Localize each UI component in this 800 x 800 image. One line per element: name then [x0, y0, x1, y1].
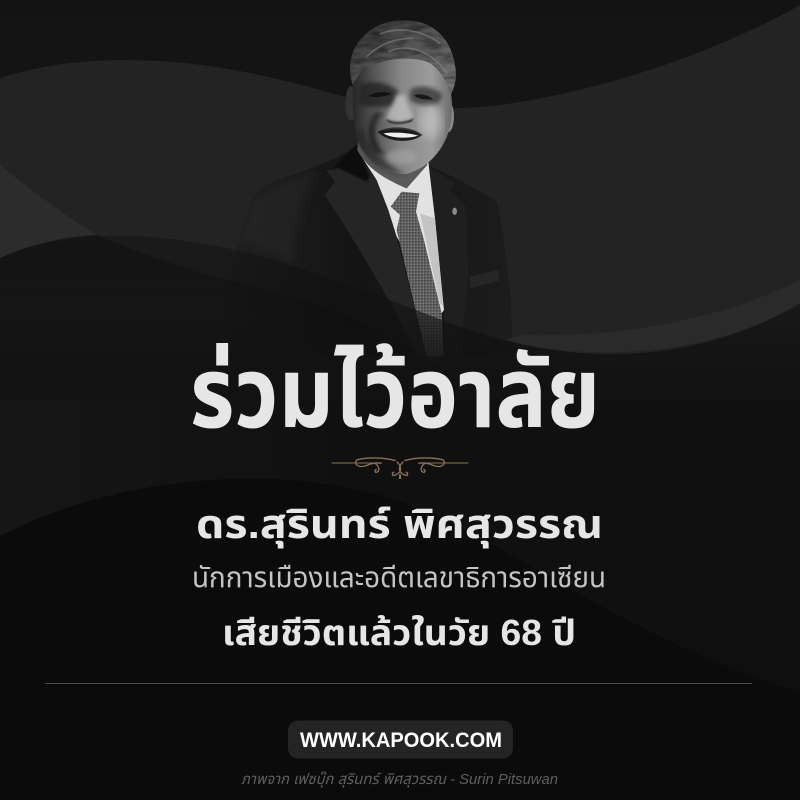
- brow shadow: [358, 82, 398, 107]
- neck: [357, 140, 427, 188]
- right ear: [442, 101, 454, 132]
- lapel pin: [452, 208, 457, 215]
- shirt: [357, 150, 444, 313]
- name heading: ดร.สุรินทร์ พิศสุวรรณ: [196, 503, 603, 548]
- hair: [350, 20, 456, 95]
- ornament divider: [332, 458, 468, 479]
- collar shadow left: [335, 145, 370, 182]
- left ear: [345, 86, 357, 121]
- background: lower section: [0, 400, 800, 800]
- nostril shadow: [386, 118, 414, 124]
- pocket: [469, 270, 499, 288]
- upper lip: [377, 127, 423, 135]
- photo credit: ภาพจาก เฟซบุ๊ก สุรินทร์ พิศสุวรรณ - Surin Pitsuwan: [241, 771, 558, 788]
- nose: [386, 95, 414, 121]
- age statement: เสียชีวิตแล้วในวัย 68 ปี: [222, 613, 576, 653]
- mouth: [378, 129, 422, 141]
- website badge: [288, 720, 513, 758]
- shirt shadow: [420, 213, 443, 307]
- subtitle: นักการเมืองและอดีตเลขาธิการอาเซียน: [192, 562, 606, 594]
- person portrait: [227, 20, 513, 357]
- shoulder highlight: [240, 170, 320, 263]
- background: lower dark wave overlay: [0, 236, 800, 400]
- left lapel: [325, 150, 427, 357]
- cheek light: [419, 105, 442, 138]
- tie: [391, 192, 444, 357]
- eyes: [368, 92, 392, 97]
- website badge: WWW.KAPOOK.COM: [300, 728, 502, 752]
- teeth: [383, 133, 418, 138]
- smile crease: [368, 112, 385, 155]
- divider line: [45, 683, 752, 684]
- right lapel: [429, 167, 468, 357]
- face: [353, 58, 452, 174]
- background: bottom dark wave: [0, 479, 800, 800]
- jacket: [227, 145, 513, 357]
- title: ร่วมไว้อาลัย: [190, 337, 600, 448]
- jaw shadow: [356, 127, 407, 174]
- background: lower-left shadow: [0, 235, 480, 400]
- hair highlights: [367, 30, 447, 73]
- right eye: [414, 94, 433, 100]
- background: left light band: [0, 165, 97, 258]
- right brow shadow: [410, 86, 443, 106]
- background: top dark wave: [0, 0, 800, 400]
- chin light: [387, 149, 417, 164]
- background: lighter grey wave: [0, 5, 800, 400]
- background: right light band: [505, 280, 800, 352]
